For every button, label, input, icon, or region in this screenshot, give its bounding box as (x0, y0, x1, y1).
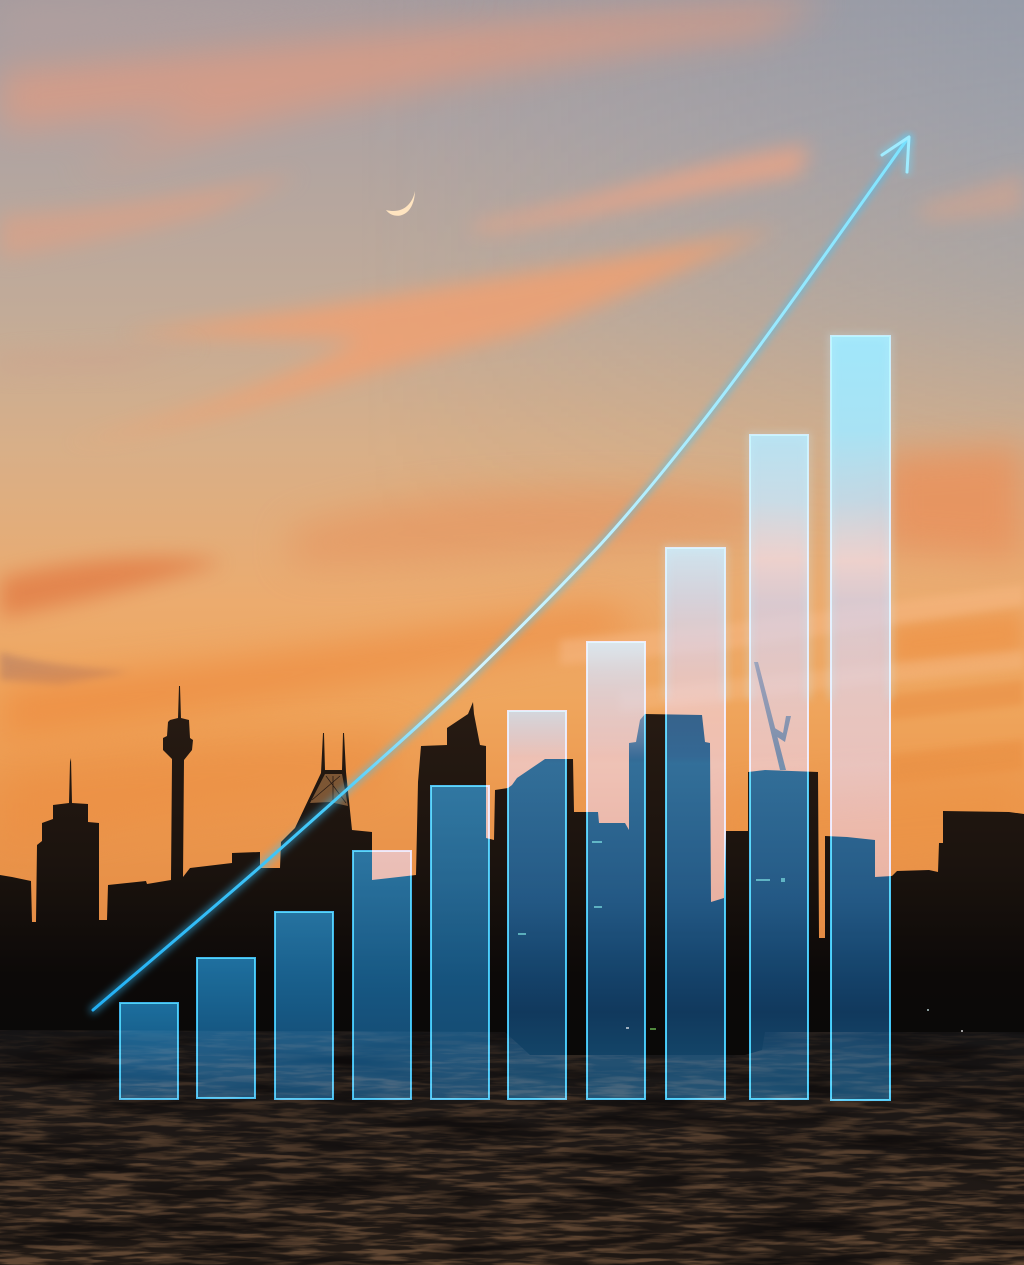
bar 10 (831, 336, 890, 1100)
bar 2 (197, 958, 255, 1098)
bar glow (666, 336, 890, 700)
water (0, 1028, 1024, 1265)
bar 4 (353, 851, 411, 1099)
bar 9 (750, 435, 808, 1099)
bar 1 (120, 1003, 178, 1099)
city lights (518, 841, 963, 1032)
bar 6 (508, 711, 566, 1099)
clouds: sunset streaks (0, 0, 1024, 880)
bar 5 (431, 786, 489, 1099)
arrow: glowing growth curve (93, 137, 909, 1010)
icon: crescent moon (386, 191, 415, 216)
bar 3 (275, 912, 333, 1099)
bar 7 (587, 642, 645, 1099)
city skyline silhouette (0, 686, 1024, 1055)
bar 8 (666, 548, 725, 1099)
bar chart: ten rising translucent bars (120, 336, 890, 1100)
crane silhouette (754, 662, 791, 770)
